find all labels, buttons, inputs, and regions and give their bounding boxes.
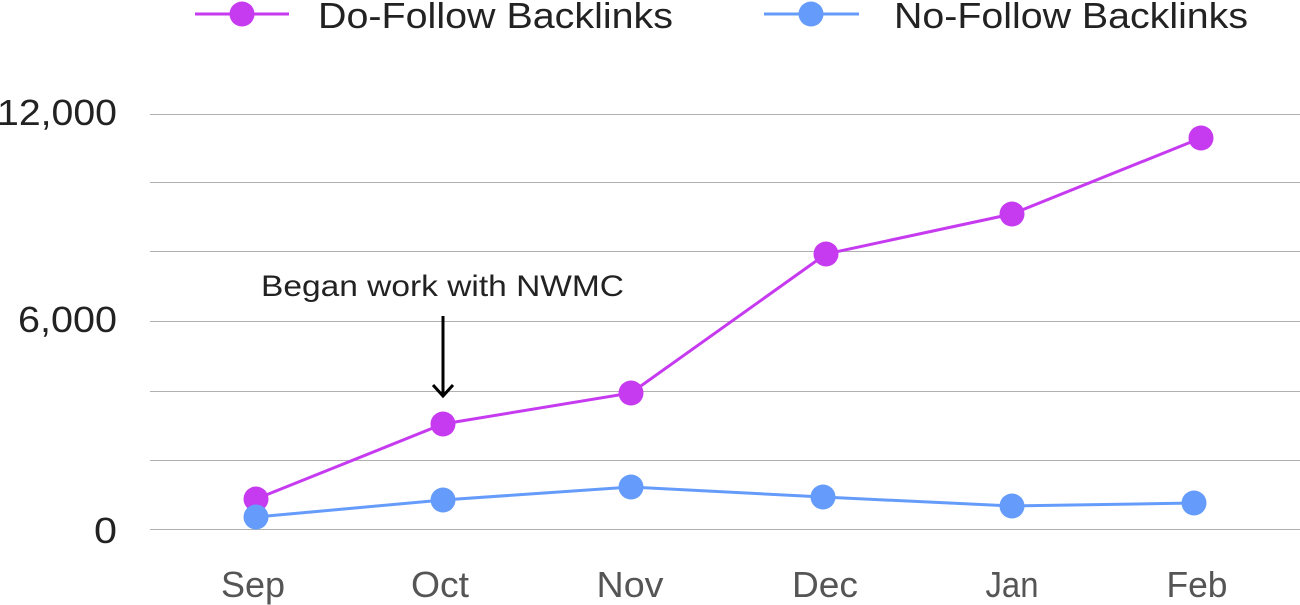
x axis labels: Nov <box>596 564 664 605</box>
x axis labels: Jan <box>986 564 1038 605</box>
x axis labels <box>221 564 1228 605</box>
y axis labels: 6,000 <box>18 299 117 340</box>
series: do-follow backlinks <box>244 126 1214 512</box>
arrow: annotation pointer <box>433 316 453 396</box>
x axis labels: Sep <box>221 564 285 605</box>
y axis labels <box>0 92 117 551</box>
legend: no-follow <box>764 0 1248 36</box>
x axis labels: Feb <box>1166 564 1228 605</box>
x axis labels: Oct <box>411 564 469 605</box>
y axis labels: 0 <box>94 510 117 551</box>
legend: do-follow <box>195 0 673 36</box>
series: no-follow backlinks <box>244 474 1206 530</box>
annotation text: Began work with NWMC <box>261 270 624 303</box>
x axis labels: Dec <box>792 564 858 605</box>
y axis labels: 12,000 <box>0 92 117 133</box>
